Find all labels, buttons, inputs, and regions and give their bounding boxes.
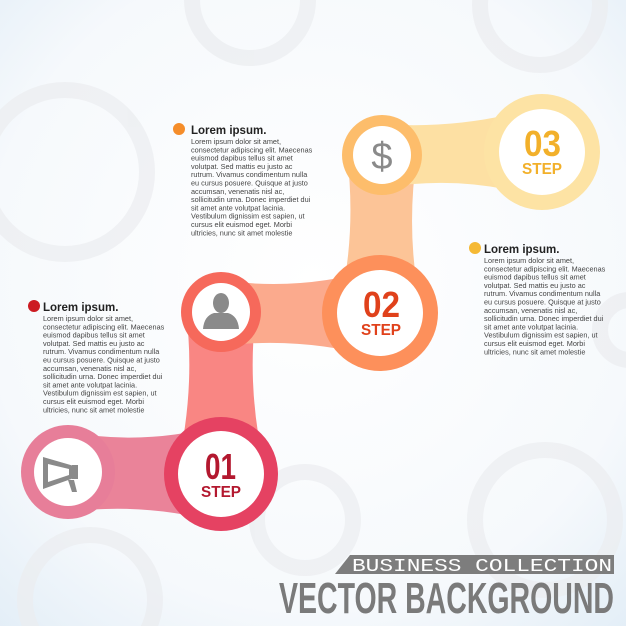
text block: top: ultricies, nunc sit amet molestie — [191, 228, 292, 237]
text block: right: sit amet ante volutpat lacinia. — [484, 322, 578, 331]
text block: left: Lorem ipsum dolor sit amet, — [43, 314, 133, 323]
banner: business collection — [335, 555, 614, 577]
text block: left: cursus elit euismod eget. Morbi — [43, 397, 144, 406]
circle: person — [181, 272, 261, 352]
circle: step 02: STEP — [361, 322, 401, 339]
text block: left: volutpat. Sed mattis eu justo ac — [43, 339, 145, 348]
text block: top: Vestibulum dignissim est sapien, ut — [191, 212, 305, 221]
text block: right: eu cursus posuere. Quisque at justo — [484, 298, 601, 306]
text block: right: cursus elit euismod eget. Morbi — [484, 339, 585, 348]
text block: top: rutrum. Vivamus condimentum nulla — [191, 170, 308, 179]
text block: right: accumsan, venenatis nisl ac, — [484, 306, 577, 315]
connector: person to step 02 — [221, 268, 380, 358]
banner: business collection: BUSINESS COLLECTION — [352, 557, 612, 577]
text block: right — [469, 242, 606, 356]
circle: step 01 — [164, 417, 278, 531]
text block: right: euismod dapibus tellus sit amet — [484, 273, 586, 282]
text block: right: consectetur adipiscing elit. Maecenas — [484, 264, 606, 273]
circle: step 03: 03 — [524, 123, 561, 164]
text block: left: accumsan, venenatis nisl ac, — [43, 364, 136, 373]
text block: left: rutrum. Vivamus condimentum nulla — [43, 347, 160, 356]
circle: step 03: STEP — [522, 161, 562, 178]
text block: left — [28, 300, 165, 414]
icon: megaphone — [43, 457, 78, 492]
text block: right: Vestibulum dignissim est sapien, ut — [484, 331, 598, 340]
circle: step 02: 02 — [363, 284, 400, 325]
text block: top: euismod dapibus tellus sit amet — [191, 154, 293, 163]
text block: top: volutpat. Sed mattis eu justo ac — [191, 162, 293, 171]
text block: left: Lorem ipsum. — [43, 302, 118, 314]
icon: dollar: $ — [371, 136, 393, 178]
circle: step 01: 01 — [205, 446, 236, 487]
connector: dollar to step 03 — [382, 106, 542, 198]
circle: step 01: STEP — [201, 484, 241, 501]
circle: megaphone — [21, 425, 115, 519]
icon: person — [203, 293, 239, 329]
text block: top: Lorem ipsum dolor sit amet, — [191, 137, 281, 146]
circle: step 02 — [322, 255, 438, 371]
text block: top: eu cursus posuere. Quisque at justo — [191, 178, 308, 188]
text block: top: Lorem ipsum. — [191, 125, 266, 137]
text block: top: sollicitudin urna. Donec imperdiet dui — [191, 195, 311, 204]
text block: top: consectetur adipiscing elit. Maecenas — [191, 145, 313, 154]
circle: dollar — [342, 115, 422, 195]
text block: left: consectetur adipiscing elit. Maecenas — [43, 322, 165, 331]
connector: step 02 to dollar — [338, 155, 422, 313]
text block: top — [173, 123, 313, 237]
text block: right: Lorem ipsum. — [484, 244, 559, 256]
text block: top: cursus elit euismod eget. Morbi — [191, 220, 292, 229]
text block: right: Lorem ipsum dolor sit amet, — [484, 256, 574, 265]
text block: left: Vestibulum dignissim est sapien, ut — [43, 389, 157, 398]
text block: left: ultricies, nunc sit amet molestie — [43, 405, 144, 414]
text block: top: sit amet ante volutpat lacinia. — [191, 203, 285, 212]
text block: right: sollicitudin urna. Donec imperdiet dui — [484, 314, 604, 323]
text block: top: accumsan, venenatis nisl ac, — [191, 187, 284, 196]
circle: step 03 — [484, 94, 600, 210]
text block: right: volutpat. Sed mattis eu justo ac — [484, 281, 586, 290]
text block: left: sit amet ante volutpat lacinia. — [43, 380, 137, 389]
text block: right: rutrum. Vivamus condimentum nulla — [484, 289, 601, 298]
connector: step 01 to person — [176, 312, 266, 474]
connector: megaphone to step 01 — [68, 425, 221, 523]
text block: right: ultricies, nunc sit amet molestie — [484, 347, 585, 356]
text block: left: euismod dapibus tellus sit amet — [43, 331, 145, 340]
text block: left: eu cursus posuere. Quisque at justo — [43, 356, 160, 364]
text block: left: sollicitudin urna. Donec imperdiet dui — [43, 372, 163, 381]
